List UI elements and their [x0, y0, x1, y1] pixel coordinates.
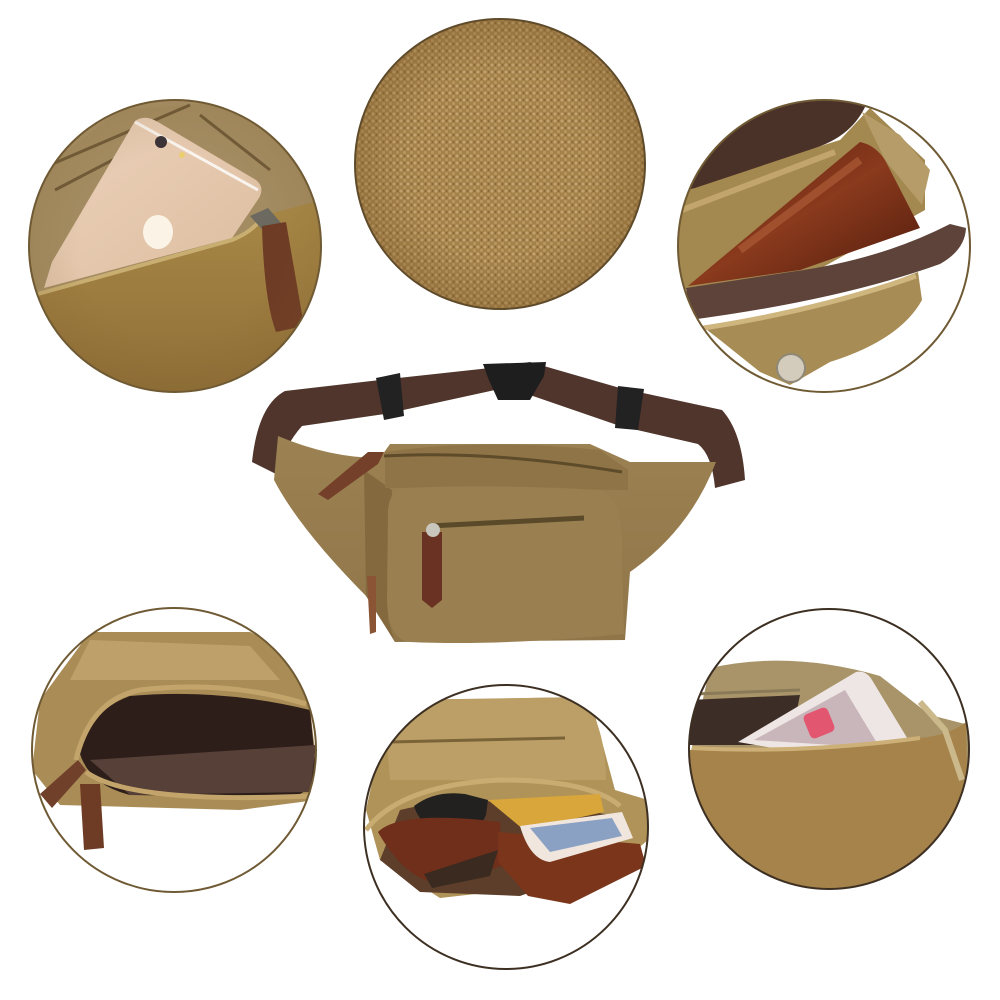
- icon: sunglasses: [414, 793, 488, 820]
- lower pocket canvas: [702, 272, 922, 385]
- icon: leather zip pull: [250, 208, 304, 332]
- dark interior: [80, 694, 316, 797]
- icon: belt sliders and buckle: [376, 362, 644, 430]
- circle: wallet in pocket: [678, 100, 970, 392]
- bag back body: [274, 436, 716, 642]
- circle: bag contents: [364, 685, 648, 969]
- icon: rose gold phone: [44, 118, 261, 288]
- icon: leather zip pull: [40, 760, 104, 850]
- icon: leather wallets: [378, 818, 646, 904]
- front pocket: [387, 486, 624, 643]
- circle: phone in front pocket: [29, 100, 321, 392]
- belt strap: [252, 362, 745, 488]
- icon: yellow card wallet: [488, 794, 604, 830]
- icon: snap button: [777, 354, 805, 382]
- icon: zip pulls: [318, 452, 442, 634]
- pocket lining: [686, 224, 966, 320]
- icon: leather wallet: [688, 142, 920, 286]
- circle: main compartment open: [32, 608, 316, 892]
- icon: smartphone: [738, 672, 907, 748]
- main product: waist bag: [252, 362, 745, 643]
- top pocket: [385, 444, 628, 490]
- circle: phone in rear pocket: [689, 609, 969, 889]
- icon: smartphone: [520, 812, 633, 862]
- side gusset shading: [364, 470, 395, 642]
- icon: metal zip chain: [920, 702, 962, 780]
- circle: canvas fabric close-up: [355, 19, 645, 309]
